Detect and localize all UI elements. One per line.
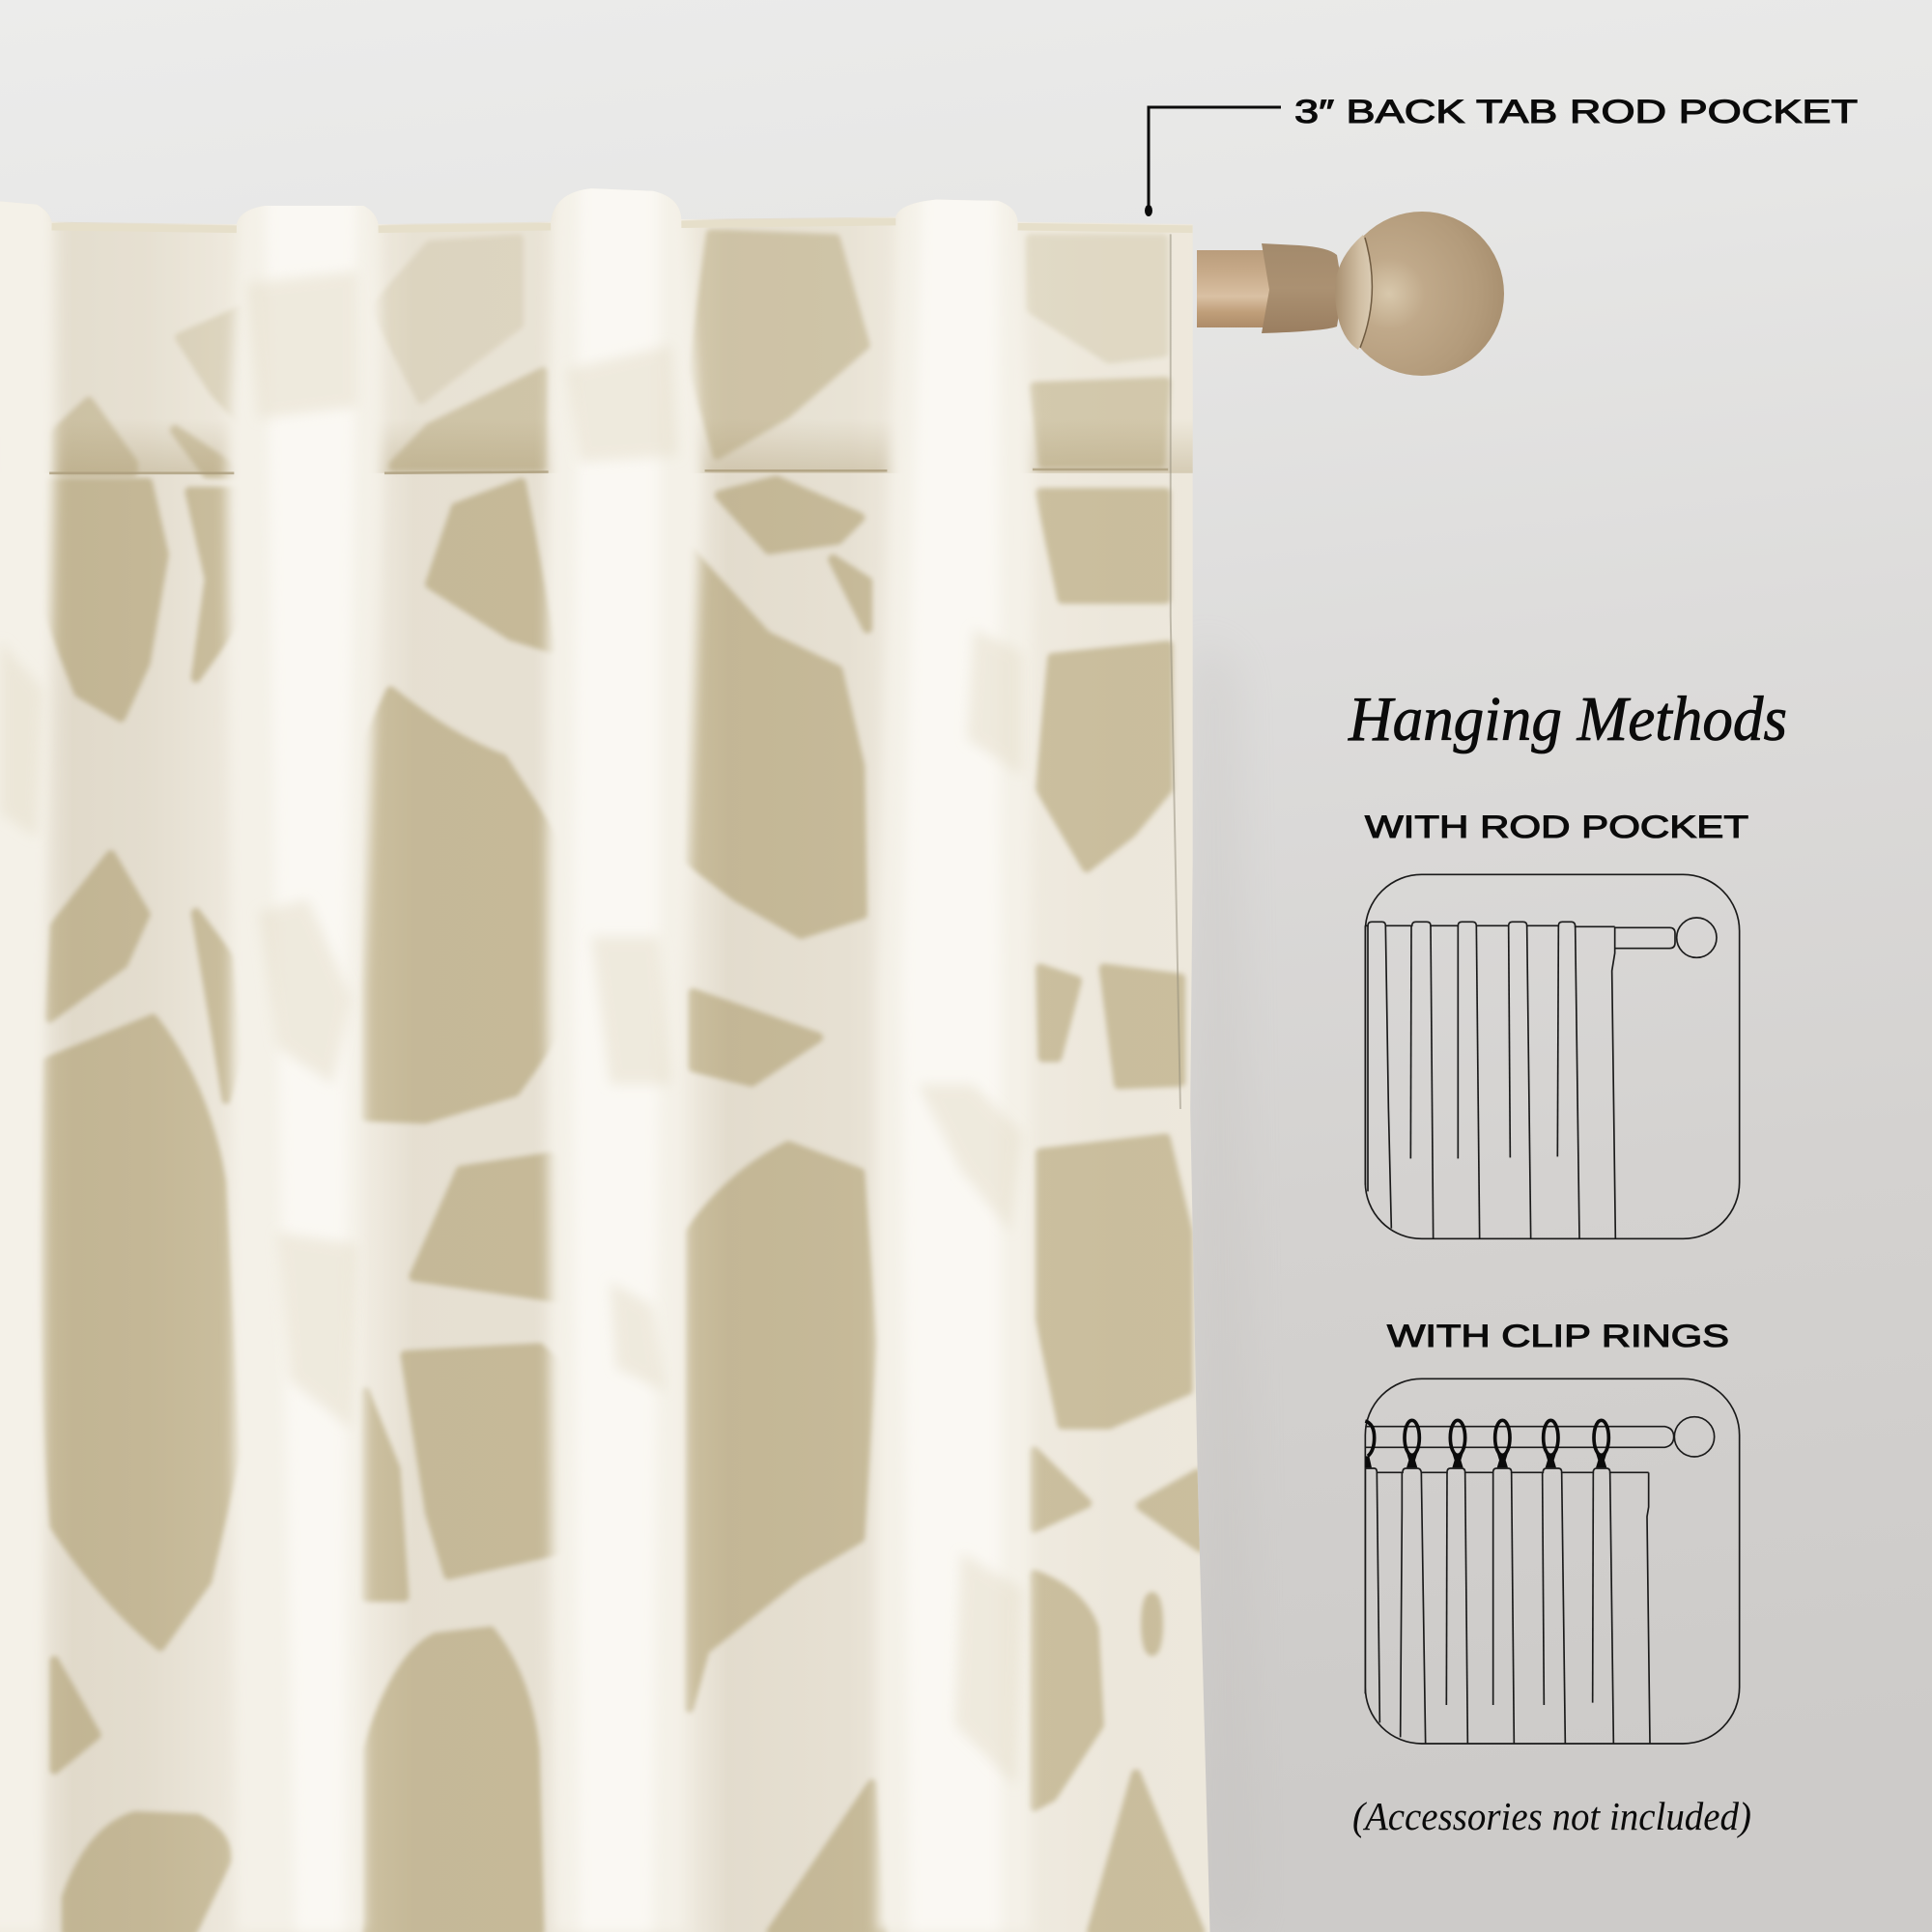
curtain rod and finial bbox=[1197, 212, 1504, 376]
top edge of fabric bbox=[52, 222, 1193, 229]
valley shading bbox=[48, 217, 871, 1932]
curtain shadow on wall bbox=[1195, 640, 1251, 1932]
rod bbox=[1197, 250, 1275, 327]
finial ball bbox=[1340, 212, 1504, 376]
callout label: 3″ BACK TAB ROD POCKET bbox=[1294, 94, 1858, 130]
curtain base fabric bbox=[0, 185, 1226, 1932]
label: with clip rings: WITH CLIP RINGS bbox=[1387, 1319, 1729, 1353]
beige lattice pattern bbox=[44, 234, 1200, 1932]
finial ring bbox=[1335, 235, 1372, 350]
faded pattern seen on pleats bbox=[0, 271, 1023, 1786]
diagram: clip rings hanging bbox=[1365, 1378, 1740, 1744]
gathered fabric shading above the hem bbox=[51, 430, 1193, 473]
diagram: rod pocket hanging bbox=[1365, 874, 1740, 1238]
label: with rod pocket: WITH ROD POCKET bbox=[1365, 810, 1748, 844]
note: accessories not included: (Accessories not included) bbox=[1352, 1794, 1751, 1838]
pleat folds bbox=[0, 160, 1033, 1932]
finial ring edge bbox=[1360, 238, 1372, 348]
upper hem band haze bbox=[55, 229, 1169, 471]
collar bbox=[1262, 243, 1343, 333]
hem stitch line bbox=[49, 469, 1168, 473]
side seam bbox=[1171, 234, 1180, 1109]
heading: hanging methods: Hanging Methods bbox=[1348, 684, 1787, 754]
curtain panel bbox=[0, 160, 1251, 1932]
callout: rod pocket leader line bbox=[1145, 107, 1281, 216]
